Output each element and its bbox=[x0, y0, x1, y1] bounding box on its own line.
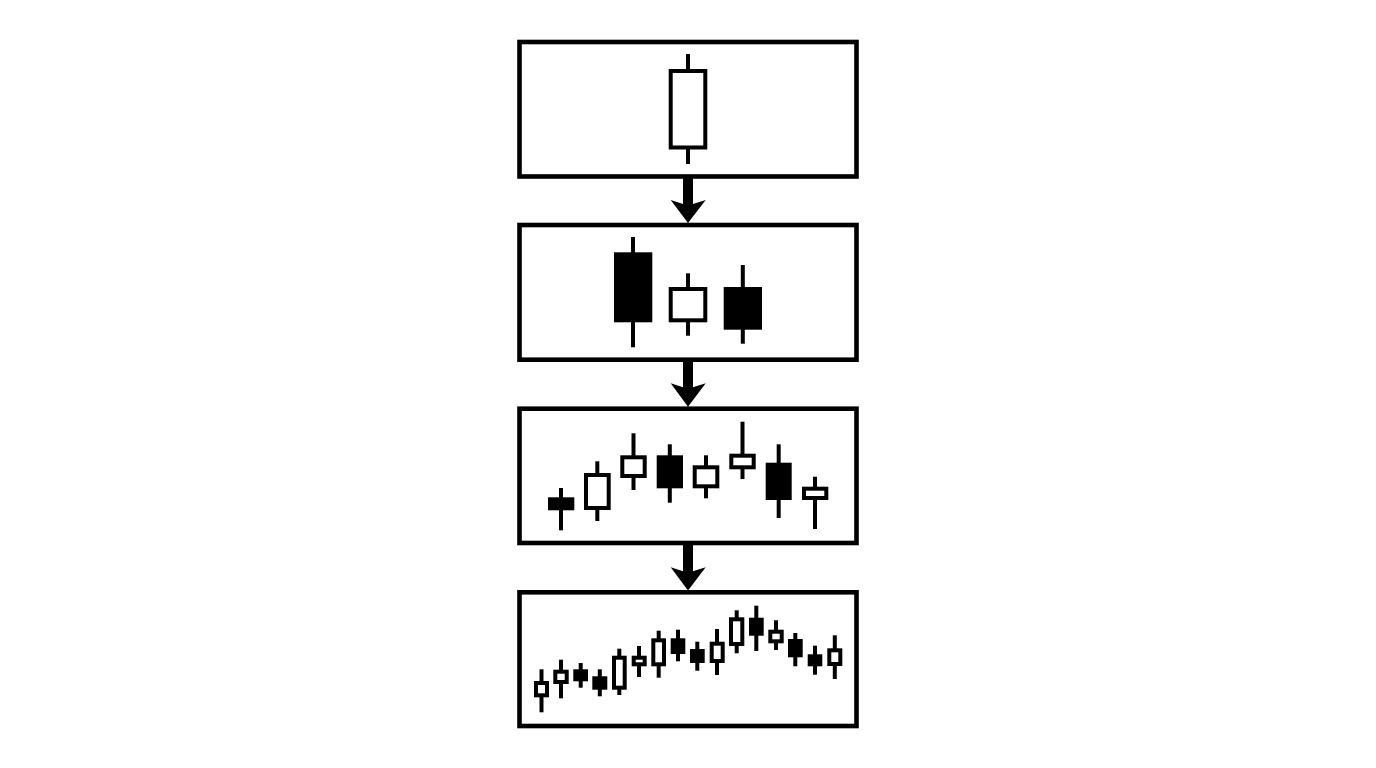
candle 15: filled bbox=[808, 646, 822, 675]
candle 2: hollow bbox=[586, 461, 609, 521]
candle 3: filled bbox=[573, 663, 588, 688]
candle 5: hollow bbox=[695, 455, 717, 498]
candle: filled medium bbox=[724, 265, 762, 344]
arrow: panel 1 to panel 2 bbox=[671, 176, 706, 223]
candle 6: hollow bbox=[731, 422, 754, 479]
candle 1: hollow bbox=[536, 669, 547, 712]
candle 11: hollow bbox=[731, 610, 742, 653]
candle 4: filled bbox=[657, 444, 683, 503]
candle 9: filled bbox=[690, 642, 705, 671]
candle 8: hollow bbox=[804, 477, 826, 529]
panel: single candle bbox=[520, 42, 856, 176]
candle 14: filled bbox=[788, 633, 803, 666]
candle 4: filled bbox=[592, 669, 607, 696]
arrow: panel 2 to panel 3 bbox=[671, 360, 706, 407]
candle 1: filled bbox=[548, 488, 574, 530]
candle 16: hollow bbox=[829, 635, 840, 679]
candle 12: filled bbox=[749, 606, 764, 651]
candle 7: filled bbox=[766, 444, 792, 518]
candle: hollow small bbox=[671, 273, 705, 336]
candle 3: hollow bbox=[622, 433, 645, 490]
panel: sixteen candles bbox=[520, 592, 856, 726]
candle 10: hollow bbox=[712, 629, 723, 675]
candle: hollow large bbox=[671, 54, 705, 164]
arrow: panel 3 to panel 4 bbox=[671, 543, 706, 590]
candle 7: hollow bbox=[653, 631, 664, 678]
candle: filled tall bbox=[614, 237, 652, 347]
candle 13: hollow bbox=[770, 620, 782, 650]
candle 5: hollow bbox=[614, 649, 625, 695]
candle 6: hollow bbox=[634, 646, 645, 677]
candle 8: filled bbox=[671, 630, 685, 661]
candle 2: hollow bbox=[555, 660, 567, 698]
panel: eight candles bbox=[520, 409, 856, 543]
panel: three candles bbox=[520, 225, 856, 360]
